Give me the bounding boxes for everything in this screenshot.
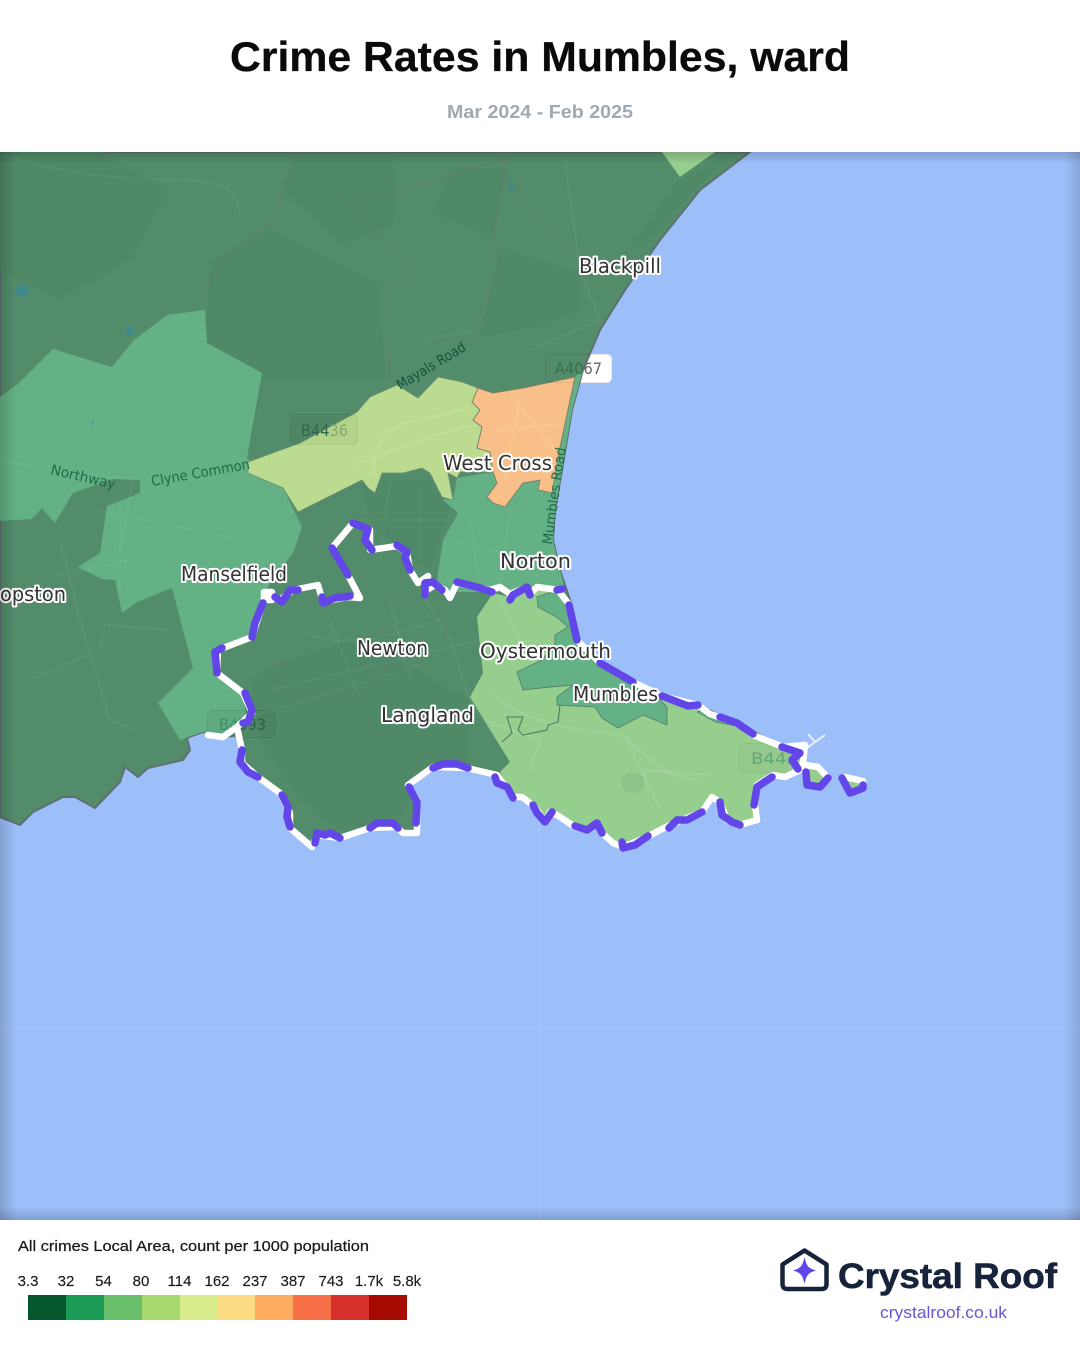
icon: house with star — [782, 1250, 826, 1289]
road label: Northway: Northway — [49, 462, 117, 493]
road shield: B4436 east: B443 — [751, 749, 798, 768]
road shield: B4436 east — [739, 743, 791, 773]
road label: Mayals Road: Mayals Road — [394, 340, 469, 393]
road shield: A4067 — [546, 354, 612, 382]
legend values: 237 — [242, 1273, 268, 1290]
road label: Mumbles Road: Mumbles Road — [540, 446, 570, 546]
place labels — [0, 254, 661, 727]
pier — [807, 734, 825, 748]
region: Norton medium green — [437, 370, 583, 592]
legend values: 743 — [318, 1273, 344, 1290]
legend values: 54 — [95, 1273, 112, 1290]
title: Crime Rates in Mumbles, ward — [230, 33, 850, 80]
road shield: A4067 background — [580, 354, 612, 383]
ward outline: Mumbles — [208, 523, 863, 848]
label: Langland: Langland — [381, 703, 474, 727]
road shield: B4593 — [208, 710, 276, 738]
white outline — [208, 523, 863, 847]
map — [0, 152, 1080, 1220]
legend colour scale — [28, 1295, 407, 1320]
region: Mumbles medium green — [517, 590, 667, 728]
region: small headland strip — [696, 710, 734, 726]
road labels — [49, 340, 570, 546]
road shield: B4436: B4436 — [301, 421, 348, 440]
region: Oystermouth light green — [470, 590, 805, 847]
road shield: B4593: B4593 — [219, 715, 266, 734]
label: Newton: Newton — [357, 636, 428, 660]
legend — [18, 1238, 422, 1320]
legend values: 387 — [280, 1273, 306, 1290]
logo: Crystal Roof — [782, 1250, 1057, 1322]
legend values: 114 — [168, 1273, 191, 1290]
region: top corner light green — [662, 152, 715, 177]
road label: Clyne Common: Clyne Common — [150, 457, 251, 490]
website url: crystalroof.co.uk — [880, 1304, 1008, 1322]
land: low crime dark green — [0, 152, 805, 847]
legend values: 162 — [204, 1273, 230, 1290]
region: island — [809, 769, 824, 783]
legend values: 1.7k — [355, 1273, 384, 1290]
label: Blackpill: Blackpill — [579, 254, 661, 278]
label: Oystermouth: Oystermouth — [480, 639, 611, 663]
sea — [0, 152, 1080, 1220]
road shield: A4067: A4067 — [555, 359, 602, 378]
legend values: 80 — [133, 1273, 149, 1290]
label: Manselfield: Manselfield — [181, 562, 287, 586]
purple dashes — [215, 523, 863, 848]
patch in Oystermouth — [622, 773, 644, 793]
boundary lines — [200, 157, 571, 742]
legend values: 5.8k — [393, 1273, 422, 1290]
label: West Cross: West Cross — [443, 451, 552, 475]
label: Bishopston (cropped): opston — [0, 582, 66, 606]
label: Mumbles: Mumbles — [573, 682, 658, 706]
legend values — [18, 1273, 422, 1290]
lakes — [15, 180, 513, 425]
region: Manselfield medium green — [0, 310, 302, 740]
legend values: 32 — [58, 1273, 74, 1290]
region: West Cross orange — [472, 377, 575, 507]
road network — [119, 480, 454, 687]
land tone parcels — [0, 152, 735, 830]
region: Clyne yellow green — [248, 377, 493, 512]
logo wordmark: Crystal Roof — [838, 1257, 1057, 1296]
label: Norton: Norton — [500, 549, 571, 573]
legend values: 3.3 — [18, 1273, 38, 1290]
legend title: All crimes Local Area, count per 1000 population — [18, 1238, 369, 1255]
road shield: B4436 — [290, 414, 358, 444]
subtitle: date range: Mar 2024 - Feb 2025 — [447, 101, 633, 122]
